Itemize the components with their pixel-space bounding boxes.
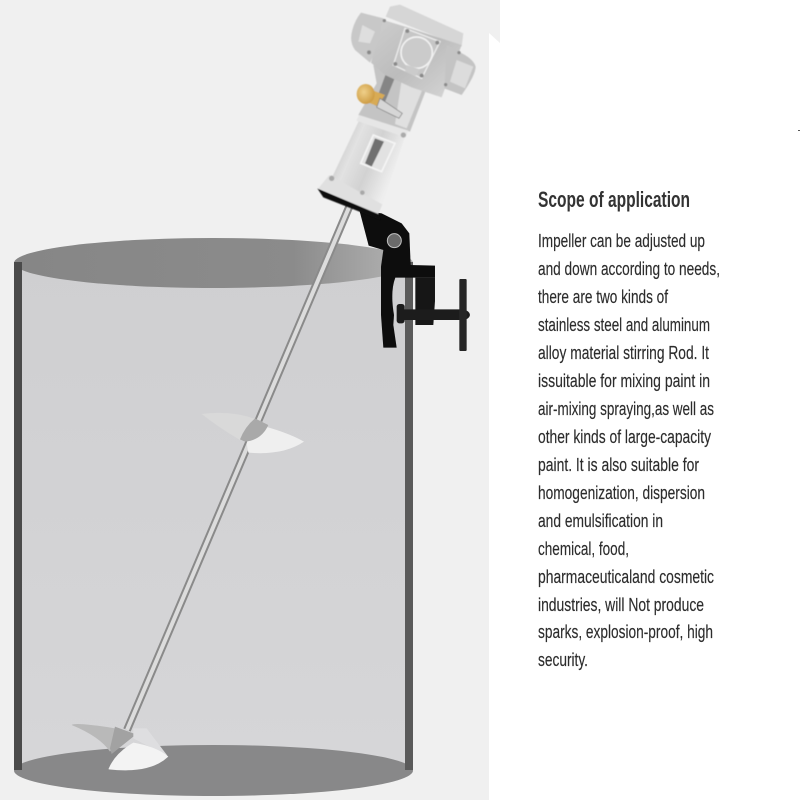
description text block: other kinds of large-capacity [538, 426, 712, 447]
tank left wall [14, 262, 22, 770]
right end cylinder [444, 45, 476, 95]
pivot bolt [387, 234, 401, 248]
description text block: chemical, food, [538, 538, 629, 559]
upper impeller [202, 413, 304, 453]
description text block: and down according to needs, [538, 258, 720, 279]
screw head [397, 304, 405, 323]
description text block: air-mixing spraying,as well as [538, 398, 714, 419]
clamp screw [403, 309, 470, 320]
collar [356, 115, 408, 137]
right jaw [415, 278, 435, 325]
small edge mark [798, 130, 800, 131]
description text block: there are two kinds of [538, 286, 669, 307]
stirring shaft [127, 205, 350, 730]
window rod [365, 138, 384, 167]
flange bolt left [329, 176, 334, 181]
description text block: security. [538, 649, 588, 670]
valve stem [368, 90, 385, 106]
neck highlight [395, 80, 423, 128]
tank right wall [405, 262, 413, 770]
lower impeller [72, 724, 168, 770]
motor body [371, 20, 462, 97]
description text block: industries, will Not produce [538, 594, 704, 615]
grey background panel [0, 0, 500, 800]
plate bolts [367, 19, 461, 86]
neck [358, 65, 427, 132]
description text block: homogenization, dispersion [538, 482, 705, 503]
mounting clamp [359, 210, 470, 351]
upper motor section [351, 5, 476, 138]
right cylinder highlight [450, 60, 473, 88]
tank interior [22, 263, 405, 771]
description text block: alloy material stirring Rod. It [538, 342, 709, 363]
mixing tank [14, 238, 413, 796]
description text block: Impeller can be adjusted up [538, 230, 705, 251]
sight window [361, 135, 395, 172]
description text block: pharmaceuticaland cosmetic [538, 566, 714, 587]
description text block: issuitable for mixing paint in [538, 370, 710, 391]
flange bolt right [360, 190, 365, 195]
lower motor section [317, 115, 407, 220]
tank bottom ellipse [14, 745, 413, 796]
port key tab [405, 65, 420, 76]
round port [401, 37, 432, 68]
left end cylinder [351, 13, 387, 63]
description text block: sparks, explosion-proof, high [538, 621, 713, 642]
air fitting [377, 98, 402, 118]
collar bolt [401, 132, 406, 138]
description text block: stainless steel and aluminum [538, 314, 710, 335]
left cylinder highlight [358, 25, 375, 43]
front plate [393, 28, 440, 78]
heading: Scope of application [538, 187, 690, 212]
neck slot [374, 72, 396, 108]
black gasket [317, 188, 381, 220]
description text block [538, 230, 720, 670]
clamp arm [359, 210, 435, 348]
flange [318, 175, 382, 214]
description text block: paint. It is also suitable for [538, 454, 699, 475]
motor top drum [386, 5, 463, 47]
tank top opening [14, 238, 413, 288]
brass valve [357, 84, 375, 104]
motor tube [330, 115, 407, 207]
description text block: and emulsification in [538, 510, 663, 531]
pneumatic motor [317, 5, 476, 220]
T handle [459, 279, 467, 351]
